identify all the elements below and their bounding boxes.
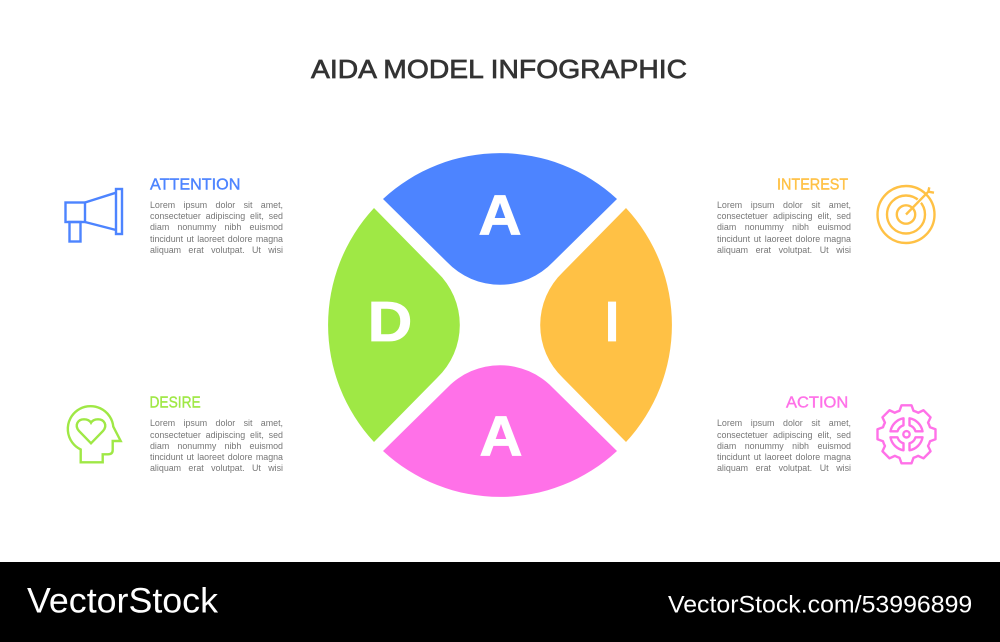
text block: diam nonummy nibh euismod — [150, 222, 283, 232]
icon: megaphone — [64, 188, 124, 243]
icon: gear — [876, 404, 937, 464]
text block: Lorem ipsum dolor sit amet, — [150, 200, 283, 210]
text block: Lorem ipsum dolor sit amet, — [150, 418, 283, 428]
text block — [150, 418, 283, 473]
text block: aliquam erat volutpat. Ut wisi — [717, 463, 851, 473]
heading: INTEREST — [777, 176, 848, 194]
text block: diam nonummy nibh euismod — [717, 222, 851, 232]
panel: interest — [717, 176, 936, 255]
text block: aliquam erat volutpat. Ut wisi — [150, 463, 283, 473]
segment: D desire — [328, 208, 460, 442]
footer bar — [0, 562, 1000, 642]
segment: A attention — [383, 153, 617, 285]
text block — [717, 200, 851, 255]
segment: I interest — [540, 208, 672, 442]
text block: diam nonummy nibh euismod — [150, 441, 283, 451]
text block: tincidunt ut laoreet dolore magna — [150, 234, 283, 244]
title: AIDA MODEL INFOGRAPHIC — [311, 54, 687, 84]
text block: tincidunt ut laoreet dolore magna — [717, 234, 851, 244]
heading: DESIRE — [150, 394, 201, 412]
text block — [150, 200, 283, 255]
icon: head with heart — [66, 405, 123, 464]
segment: A action — [383, 365, 617, 497]
text block: aliquam erat volutpat. Ut wisi — [150, 245, 283, 255]
text block: Lorem ipsum dolor sit amet, — [717, 418, 851, 428]
text block: tincidunt ut laoreet dolore magna — [150, 452, 283, 462]
segment: D desire: D — [368, 289, 412, 353]
panel: desire — [66, 394, 283, 473]
text block: Lorem ipsum dolor sit amet, — [717, 200, 851, 210]
text block: aliquam erat volutpat. Ut wisi — [717, 245, 851, 255]
panel: attention — [64, 176, 283, 255]
watermark logo: VectorStock — [27, 581, 218, 620]
text block: consectetuer adipiscing elit, sed — [150, 211, 283, 221]
watermark url: VectorStock.com/53996899 — [668, 592, 972, 618]
segment: I interest: I — [605, 290, 619, 354]
heading: ACTION — [786, 394, 848, 411]
text block: consectetuer adipiscing elit, sed — [150, 430, 283, 440]
text block: tincidunt ut laoreet dolore magna — [717, 452, 851, 462]
panel: action — [717, 394, 937, 473]
segment: A action: A — [479, 405, 523, 468]
text block: consectetuer adipiscing elit, sed — [717, 211, 851, 221]
text block — [717, 418, 851, 473]
chart: AIDA circle — [328, 153, 672, 497]
heading: ATTENTION — [150, 176, 240, 193]
segment: A attention: A — [478, 184, 522, 247]
text block: diam nonummy nibh euismod — [717, 441, 851, 451]
text block: consectetuer adipiscing elit, sed — [717, 430, 851, 440]
icon: target — [876, 184, 936, 244]
